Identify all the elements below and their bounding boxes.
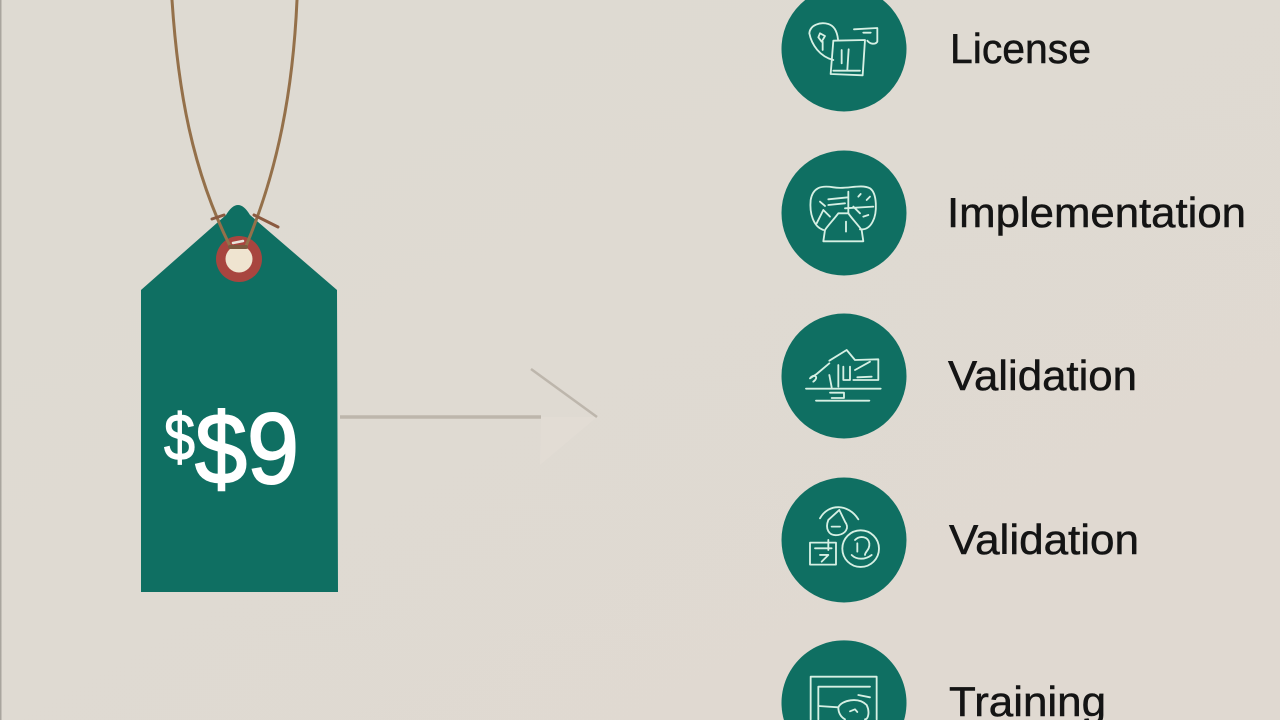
tag eyelet <box>216 236 262 282</box>
item: Training <box>781 640 1106 720</box>
arrow <box>340 369 597 465</box>
item: Validation <box>782 314 1137 438</box>
label: License <box>950 25 1091 72</box>
tag body <box>141 205 338 592</box>
icon: implementation plan <box>782 150 906 276</box>
item: Validation (second) <box>782 478 1139 602</box>
label: Validation <box>948 352 1137 399</box>
hanging string <box>172 0 297 247</box>
item: License <box>782 0 1091 111</box>
price: $$9: $9 <box>195 393 299 505</box>
label: Validation <box>949 516 1139 563</box>
icon: validation people and chart <box>782 478 906 602</box>
item: Implementation <box>782 150 1246 276</box>
icon: training screen <box>781 640 907 720</box>
price: $$9: $ <box>164 400 195 474</box>
label: Implementation <box>947 189 1246 236</box>
icon: license document <box>782 0 907 111</box>
icon: validation drawing <box>782 314 906 438</box>
price tag <box>141 0 338 592</box>
